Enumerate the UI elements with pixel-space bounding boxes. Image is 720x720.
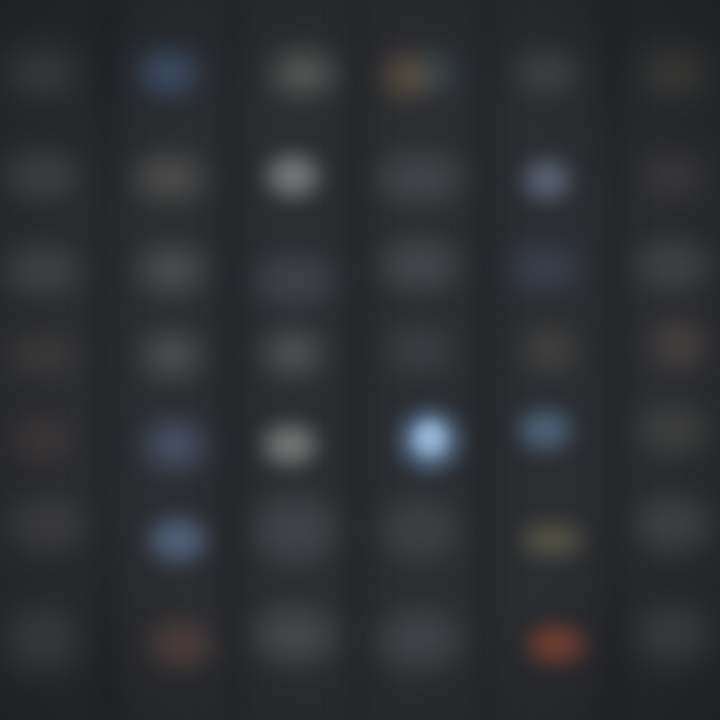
row 5 glows — [8, 406, 709, 467]
row 1 glows — [4, 46, 709, 98]
dark column gutters — [95, 0, 624, 720]
brightest tile highlight — [415, 422, 445, 454]
row 4 glows — [4, 321, 706, 377]
red tile — [529, 627, 585, 663]
brightest tile glow — [402, 412, 458, 468]
row 6 glows — [5, 496, 713, 564]
row 3 glows — [2, 241, 711, 302]
row 2 glows — [2, 151, 709, 202]
row 2 bright tiles — [267, 155, 570, 200]
row 6 coloured tiles — [150, 518, 582, 562]
row 7 glows — [2, 605, 713, 674]
row 5 bright tiles — [264, 410, 571, 465]
